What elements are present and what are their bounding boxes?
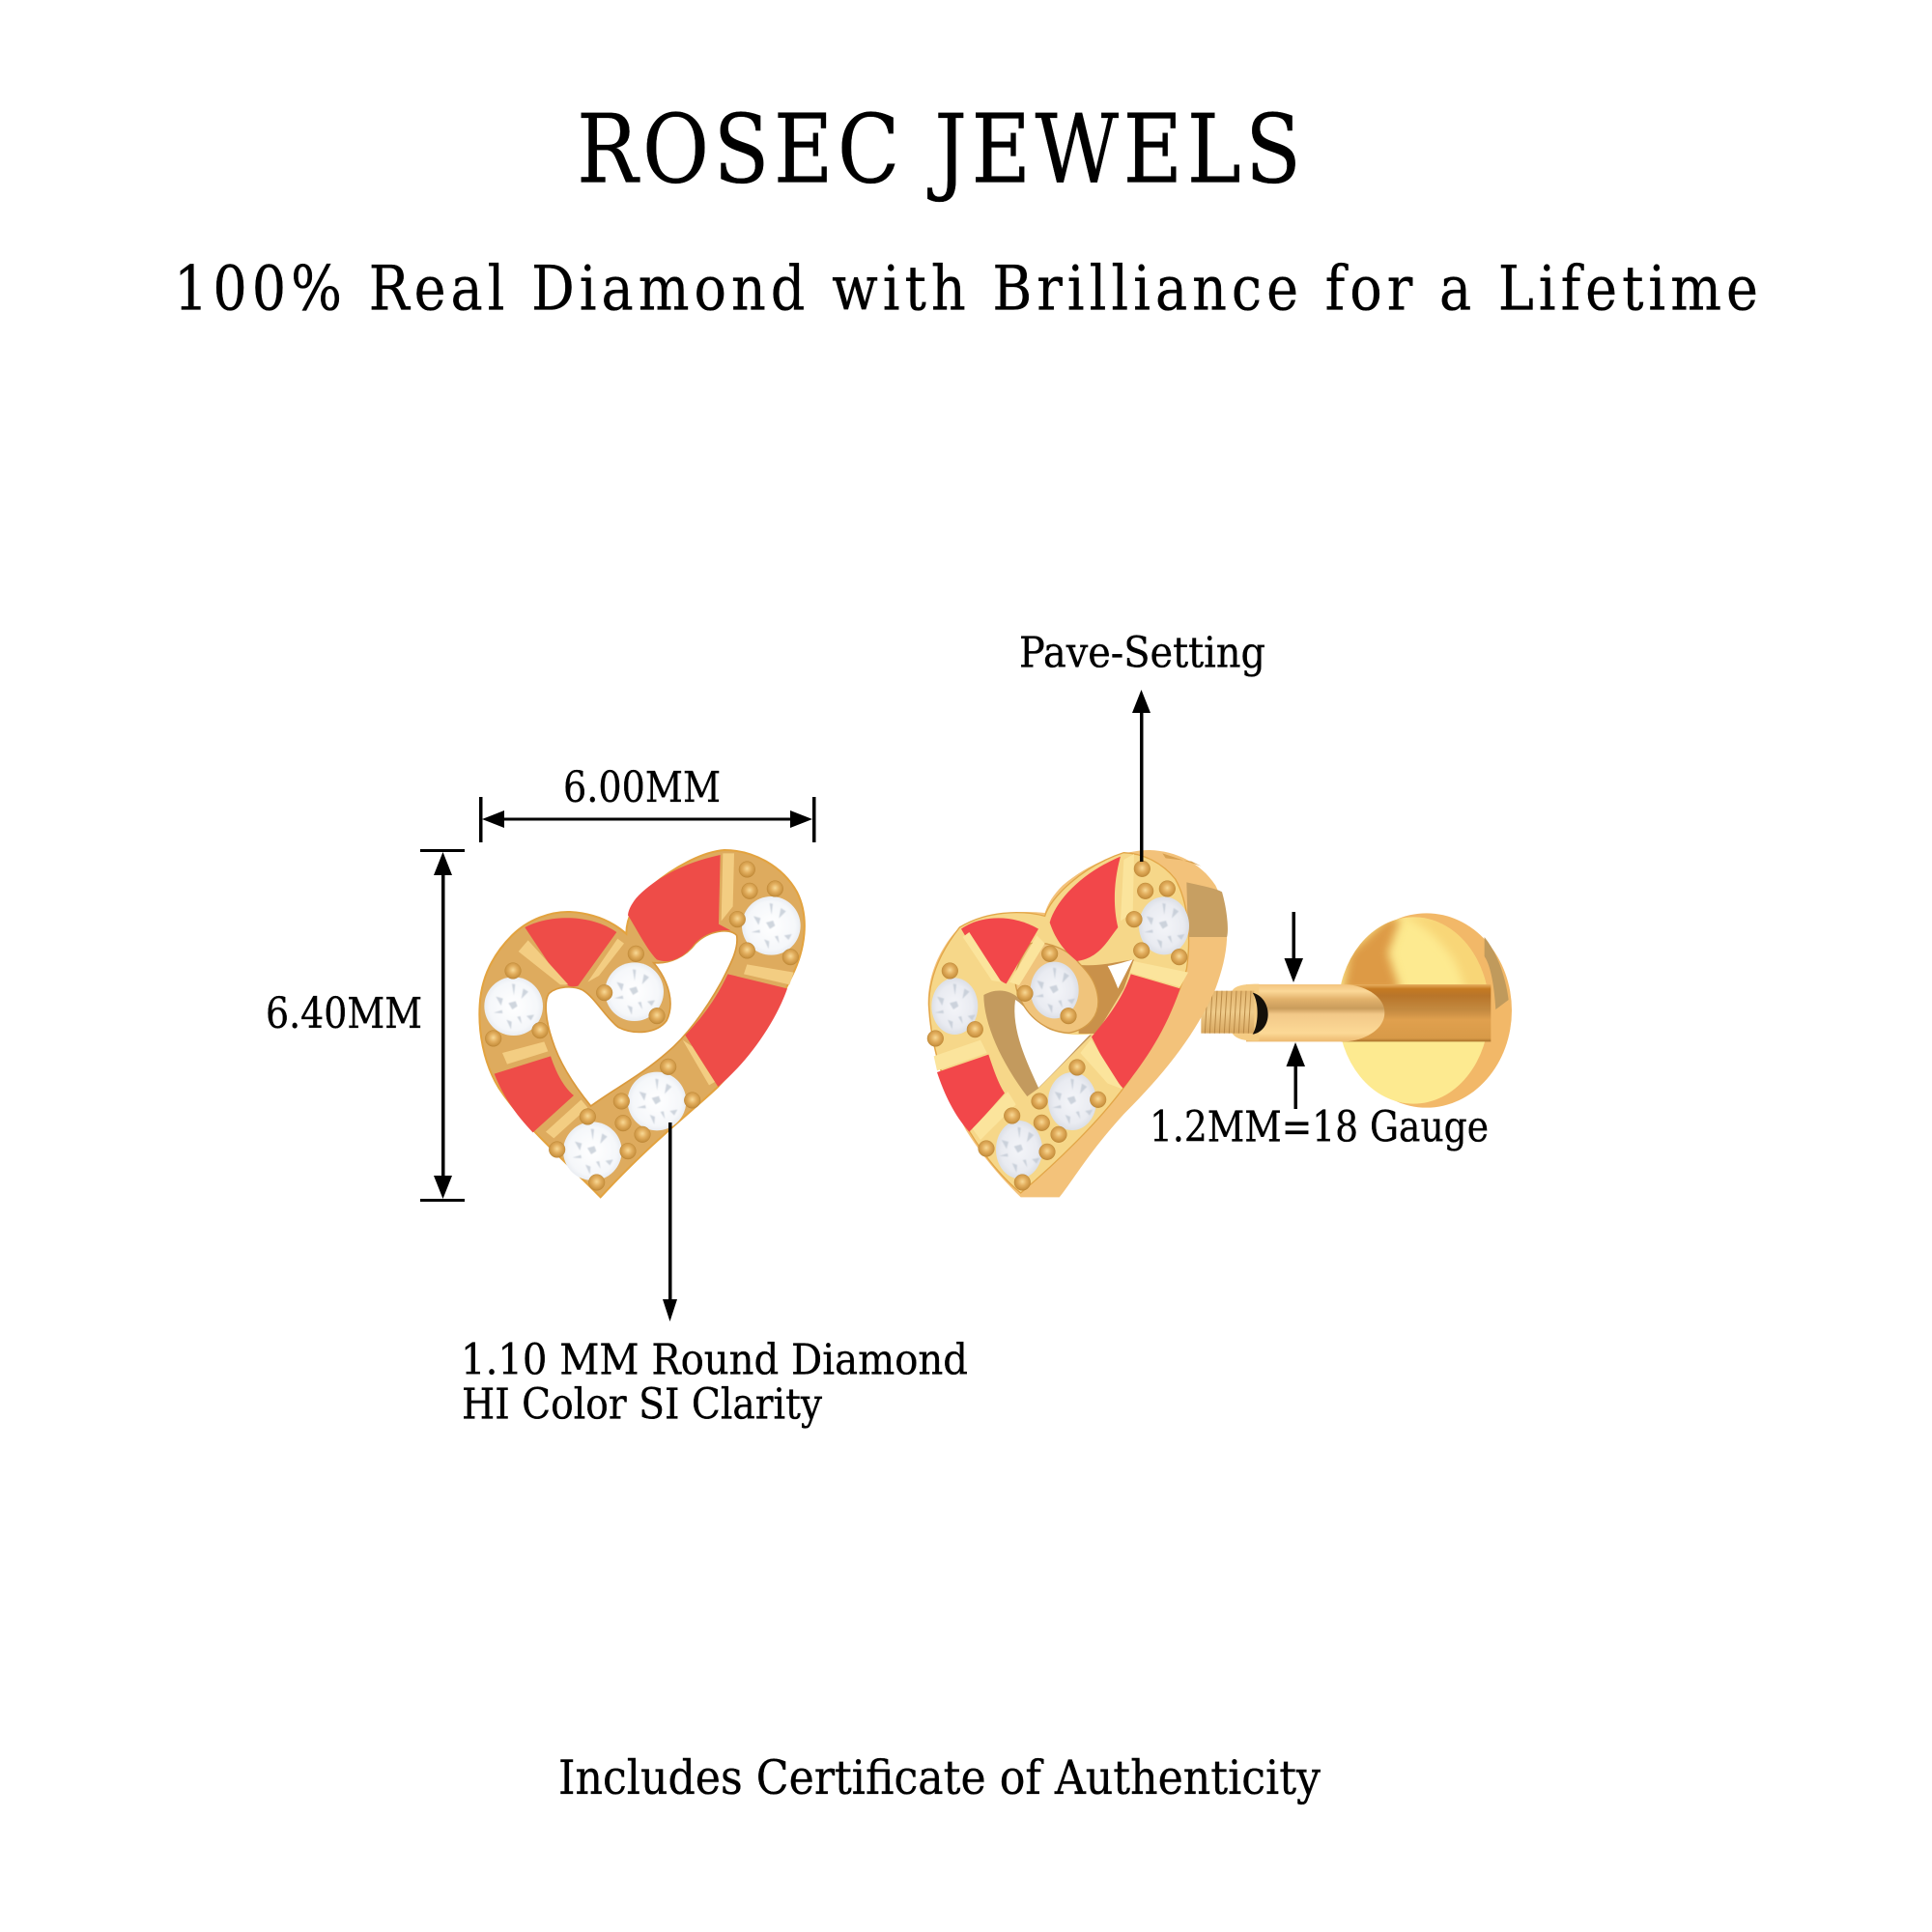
certificate note: Includes Certificate of Authenticity	[558, 1750, 1321, 1805]
width dimension arrow	[479, 797, 815, 842]
polished bands	[502, 853, 794, 1138]
threaded screw	[1201, 984, 1268, 1040]
prong beads	[927, 861, 1187, 1190]
height dimension arrow	[420, 849, 465, 1202]
inner wall of heart	[983, 990, 1092, 1096]
diamond specification text: 1.10 MM Round Diamond	[461, 1335, 968, 1385]
diamonds	[931, 896, 1189, 1179]
enamel segments	[495, 855, 787, 1132]
polished bands	[934, 854, 1188, 1140]
subtitle: 100% Real Diamond with Brilliance for a Lifetime	[174, 253, 1758, 326]
pave setting arrow	[1132, 690, 1151, 862]
diamond specification text: HI Color SI Clarity	[462, 1379, 822, 1430]
diamond specification text	[461, 1335, 968, 1430]
diamond leader arrow	[663, 1122, 677, 1321]
side view heart earring	[927, 850, 1268, 1197]
title: ROSEC JEWELS	[577, 94, 1301, 205]
enamel segments	[937, 857, 1180, 1132]
heart opening	[1014, 1000, 1091, 1088]
drop setting	[1015, 943, 1098, 1033]
diamonds	[484, 896, 801, 1180]
front view heart earring	[479, 850, 805, 1197]
width label: 6.00MM	[563, 763, 721, 812]
pave setting label: Pave-Setting	[1019, 628, 1265, 678]
prong beads	[485, 862, 799, 1190]
height label: 6.40MM	[266, 989, 422, 1038]
gauge arrows	[1285, 912, 1305, 1109]
gauge label: 1.2MM=18 Gauge	[1150, 1103, 1489, 1151]
wall behind drop	[1077, 959, 1134, 1034]
side view earring post and back disc	[1246, 913, 1512, 1108]
